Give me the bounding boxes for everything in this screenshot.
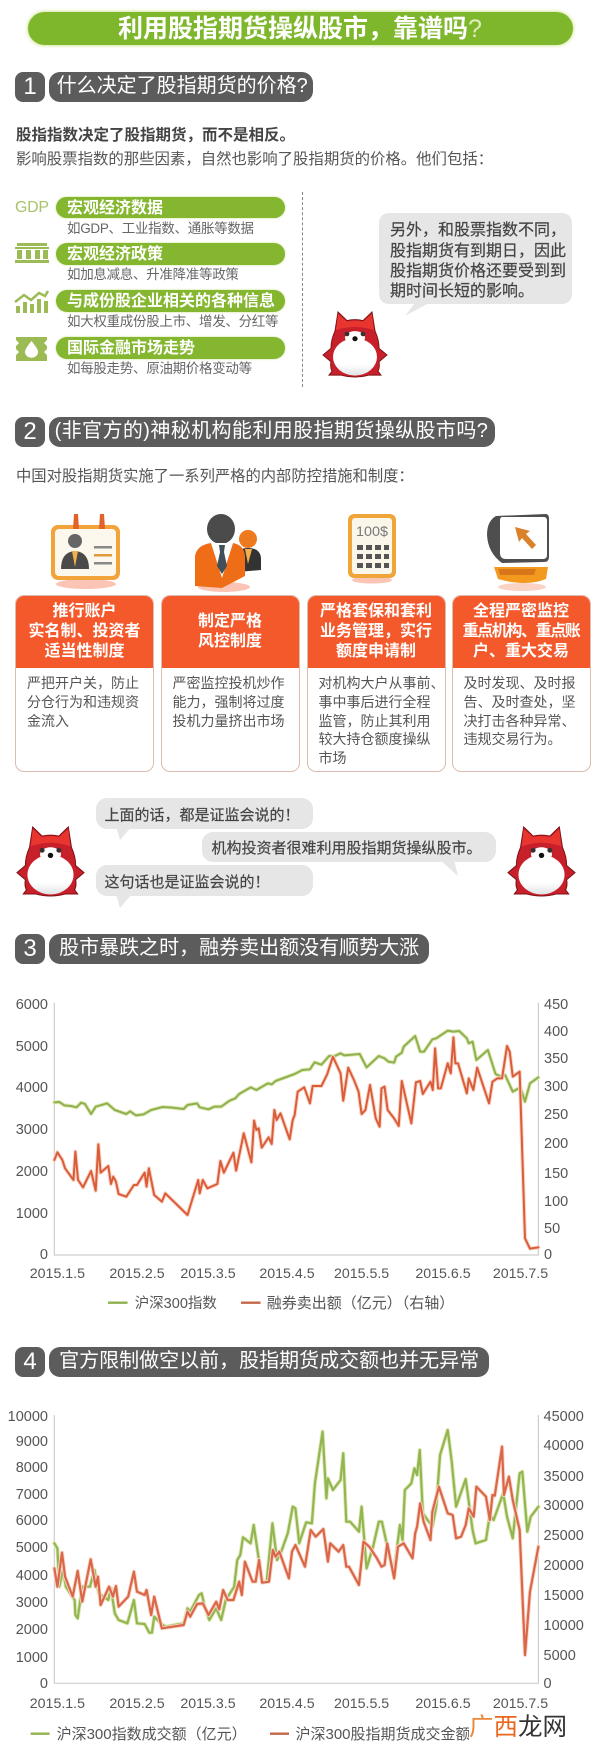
card 3 header xyxy=(308,596,444,668)
line chart: CSI 300 turnover vs futures turnover xyxy=(8,1409,584,1743)
speech bubble: top tail xyxy=(117,829,130,840)
card 1 body: 金流入 xyxy=(27,713,69,729)
icon: calculator: 100$ xyxy=(356,523,388,539)
card 1 body: 严把开户关，防止 xyxy=(27,675,139,691)
callout: expiry date speech bubble: 股指期货价格还要受到到 xyxy=(390,262,566,280)
section 1 number: 1 xyxy=(23,73,37,100)
line chart: CSI 300 index vs short-selling amount: 200 xyxy=(544,1136,568,1152)
card 4 header xyxy=(452,596,590,668)
card 3 body: 监管，防止其利用 xyxy=(318,713,430,729)
line chart: CSI 300 turnover vs futures turnover: 1000 xyxy=(16,1650,48,1666)
line chart: CSI 300 turnover vs futures turnover: 9000 xyxy=(16,1434,48,1450)
line chart: CSI 300 turnover vs futures turnover: 40000 xyxy=(544,1438,584,1454)
line chart: CSI 300 turnover vs futures turnover: 沪深300指数成交额（亿元） xyxy=(57,1725,247,1743)
section 4 number: 4 xyxy=(23,1348,37,1375)
icon: bank xyxy=(15,243,49,263)
card 4 body: 及时发现、及时报 xyxy=(464,675,576,691)
line chart: CSI 300 turnover vs futures turnover: 5000 xyxy=(16,1540,48,1556)
line chart: CSI 300 turnover vs futures turnover: 0 xyxy=(544,1676,552,1692)
card 1 body: 分仓行为和违规资 xyxy=(27,694,139,710)
line chart: CSI 300 turnover vs futures turnover: 20000 xyxy=(544,1558,584,1574)
section 3 heading: 股市暴跌之时，融券卖出额没有顺势大涨 xyxy=(59,937,419,959)
card 3 body: 市场 xyxy=(318,750,346,766)
card 2 body: 投机力量挤出市场 xyxy=(172,713,284,729)
line chart: CSI 300 turnover vs futures turnover: 2015.3.5 xyxy=(180,1696,236,1712)
line chart: CSI 300 turnover vs futures turnover: 10000 xyxy=(544,1618,584,1634)
icon: GDP: GDP xyxy=(15,199,49,216)
speech bubble: middle tail xyxy=(442,862,458,876)
line chart: CSI 300 index vs short-selling amount: 0 xyxy=(40,1247,48,1263)
section 4 heading: 官方限制做空以前，股指期货成交额也并无异常 xyxy=(59,1350,479,1372)
section 3 heading xyxy=(49,934,429,964)
line chart: CSI 300 index vs short-selling amount: 350 xyxy=(544,1051,568,1067)
card 1 header: 推行账户 xyxy=(52,603,116,620)
line chart: CSI 300 turnover vs futures turnover: 30000 xyxy=(544,1498,584,1514)
section 3 number: 3 xyxy=(23,935,37,962)
section 4 number xyxy=(15,1347,45,1377)
line chart: CSI 300 turnover vs futures turnover: 25000 xyxy=(544,1528,584,1544)
line chart: CSI 300 turnover vs futures turnover: 2015.4.5 xyxy=(259,1696,315,1712)
pill: international markets: 国际金融市场走势 xyxy=(67,340,195,357)
speech bubble 3: 这句话也是证监会说的！ xyxy=(104,874,270,891)
line chart: CSI 300 index vs short-selling amount: 融券卖出额（亿元）（右轴） xyxy=(267,1295,454,1312)
line chart: CSI 300 index vs short-selling amount: 150 xyxy=(544,1166,568,1182)
line chart: CSI 300 turnover vs futures turnover: 15000 xyxy=(544,1588,584,1604)
line chart: CSI 300 index vs short-selling amount: 450 xyxy=(544,997,568,1013)
line chart: CSI 300 index vs short-selling amount: 0 xyxy=(544,1247,552,1263)
line chart: CSI 300 index vs short-selling amount: 2015.2.5 xyxy=(109,1266,165,1282)
card 2 body xyxy=(172,675,284,729)
line chart: CSI 300 index vs short-selling amount: 6000 xyxy=(16,997,48,1013)
card 1 header xyxy=(16,596,153,668)
card 4 body: 违规交易行为。 xyxy=(464,731,562,747)
card 3 body xyxy=(318,675,444,766)
section 2 heading: (非官方的)神秘机构能利用股指期货操纵股市吗? xyxy=(55,420,488,442)
line chart: CSI 300 turnover vs futures turnover: 10000 xyxy=(8,1409,48,1425)
speech bubble 2 xyxy=(202,832,496,862)
line chart: CSI 300 turnover vs futures turnover: 4000 xyxy=(16,1568,48,1584)
card 4 header: 重点机构、重点账 xyxy=(463,623,579,640)
pill: constituent company info: 与成份股企业相关的各种信息 xyxy=(67,293,275,310)
line chart: CSI 300 index vs short-selling amount: 2015.3.5 xyxy=(180,1266,236,1282)
line chart: CSI 300 index vs short-selling amount: 2015.1.5 xyxy=(30,1266,85,1282)
text: macro policy detail: 如加息减息、升准降准等政策 xyxy=(67,267,239,282)
icon: monitor with cursor xyxy=(487,514,549,591)
callout: expiry date speech bubble xyxy=(379,213,572,316)
line chart: CSI 300 turnover vs futures turnover: 2015.1.5 xyxy=(30,1696,85,1712)
line chart: CSI 300 index vs short-selling amount: 3000 xyxy=(16,1122,48,1138)
card 4 body: 决打击各种异常、 xyxy=(464,713,576,729)
section 1 number xyxy=(15,72,45,102)
line chart: CSI 300 turnover vs futures turnover: 2000 xyxy=(16,1622,48,1638)
card 3 header: 额度申请制 xyxy=(336,643,416,660)
line chart: CSI 300 turnover vs futures turnover: 2015.6.5 xyxy=(415,1696,471,1712)
callout: expiry date speech bubble: 股指期货有到期日，因此 xyxy=(390,242,566,260)
line chart: CSI 300 index vs short-selling amount: 2015.6.5 xyxy=(415,1266,471,1282)
line chart: CSI 300 turnover vs futures turnover: 6000 xyxy=(16,1513,48,1529)
pill: macro data: 宏观经济数据 xyxy=(67,200,163,217)
line chart: CSI 300 index vs short-selling amount: 2015.5.5 xyxy=(334,1266,389,1282)
line chart: CSI 300 index vs short-selling amount: 2000 xyxy=(16,1164,48,1180)
text: macro data detail: 如GDP、工业指数、通胀等数据 xyxy=(67,221,254,236)
card 2 body: 严密监控投机炒作 xyxy=(172,675,284,691)
icon: ID card xyxy=(51,514,120,589)
line chart: CSI 300 turnover vs futures turnover: 7000 xyxy=(16,1487,48,1503)
callout: expiry date speech bubble: 另外，和股票指数不同， xyxy=(390,221,566,239)
card 4 body xyxy=(464,675,576,747)
line chart: CSI 300 turnover vs futures turnover: 2015.5.5 xyxy=(334,1696,389,1712)
speech bubble 2: 机构投资者很难利用股指期货操纵股市。 xyxy=(212,840,482,857)
card 2 header: 制定严格 xyxy=(198,613,262,630)
line chart: CSI 300 turnover vs futures turnover: 2015.2.5 xyxy=(109,1696,165,1712)
title: 利用股指期货操纵股市，靠谱吗? xyxy=(118,15,482,43)
speech bubble 3 xyxy=(96,865,313,896)
panel: card 1 xyxy=(15,595,154,772)
line chart: CSI 300 turnover vs futures turnover: 45000 xyxy=(544,1409,584,1425)
icon: calculator xyxy=(348,514,396,584)
pill: macro policy: 宏观经济政策 xyxy=(67,246,163,263)
line chart: CSI 300 index vs short-selling amount xyxy=(16,997,568,1312)
icon: businessmen xyxy=(195,514,261,592)
line chart: CSI 300 turnover vs futures turnover: 5000 xyxy=(544,1648,576,1664)
section 4 heading xyxy=(49,1347,489,1377)
card 2 header xyxy=(162,596,298,668)
line chart: CSI 300 index vs short-selling amount: 4000 xyxy=(16,1080,48,1096)
line chart: CSI 300 turnover vs futures turnover: 2015.7.5 xyxy=(493,1696,548,1712)
card 4 body: 告、及时查处，坚 xyxy=(464,694,576,710)
card 3 body: 事中事后进行全程 xyxy=(318,694,430,710)
section 2 number xyxy=(15,417,45,447)
panel: card 2 xyxy=(160,595,300,772)
line chart: CSI 300 index vs short-selling amount: 250 xyxy=(544,1107,568,1123)
card 4 header: 户、重大交易 xyxy=(473,643,569,660)
section 1 heading: 什么决定了股指期货的价格? xyxy=(57,75,308,97)
pill: international markets xyxy=(56,337,285,359)
line chart: CSI 300 turnover vs futures turnover: 8000 xyxy=(16,1460,48,1476)
title xyxy=(28,12,572,45)
card 3 header: 严格套保和套利 xyxy=(320,603,432,620)
icon: left fox mascot xyxy=(16,826,85,896)
pill: macro data xyxy=(56,197,285,218)
card 1 body xyxy=(27,675,139,729)
card 1 header: 实名制、投资者 xyxy=(28,623,140,640)
card 3 body: 对机构大户从事前、 xyxy=(318,675,444,691)
pill: macro policy xyxy=(56,243,285,265)
card 3 header: 业务管理，实行 xyxy=(320,623,432,640)
section 1 heading xyxy=(49,72,313,102)
line chart: CSI 300 turnover vs futures turnover: 35000 xyxy=(544,1469,584,1485)
panel: card 4 xyxy=(452,595,590,772)
line chart: CSI 300 index vs short-selling amount: 1000 xyxy=(16,1206,48,1222)
line chart: CSI 300 index vs short-selling amount: 400 xyxy=(544,1024,568,1040)
line chart: CSI 300 index vs short-selling amount: 2015.4.5 xyxy=(259,1266,315,1282)
line chart: CSI 300 index vs short-selling amount: 沪深300指数 xyxy=(135,1295,217,1312)
card 4 header: 全程严密监控 xyxy=(473,603,569,620)
line chart: CSI 300 index vs short-selling amount: 100 xyxy=(544,1194,568,1210)
intro sentence: 影响股票指数的那些因素，自然也影响了股指期货的价格。他们包括： xyxy=(16,151,493,168)
section 2 intro: 中国对股指期货实施了一系列严格的内部防控措施和制度： xyxy=(16,468,414,485)
card 1 header: 适当性制度 xyxy=(44,643,124,660)
line chart: CSI 300 index vs short-selling amount: 2015.7.5 xyxy=(493,1266,548,1282)
text: international markets detail: 如每股走势、原油期价格变动等 xyxy=(67,361,252,376)
icon: oil drop xyxy=(16,337,47,361)
callout: expiry date speech bubble: 期时间长短的影响。 xyxy=(390,282,534,300)
icon: right fox mascot xyxy=(507,826,576,896)
line chart: CSI 300 turnover vs futures turnover: 沪深300股指期货成交金额（亿元） xyxy=(296,1725,531,1743)
section 3 number xyxy=(15,934,45,964)
text: company info detail: 如大权重成份股上市、增发、分红等 xyxy=(67,314,278,329)
line chart: CSI 300 index vs short-selling amount: 50 xyxy=(544,1221,560,1237)
line chart: CSI 300 turnover vs futures turnover: 0 xyxy=(40,1676,48,1692)
speech bubble 1: 上面的话，都是证监会说的！ xyxy=(104,807,300,824)
lead sentence: 股指指数决定了股指期货，而不是相反。 xyxy=(16,127,295,144)
card 2 header: 风控制度 xyxy=(198,633,262,650)
panel: card 3 xyxy=(306,595,446,772)
line chart: CSI 300 turnover vs futures turnover: 3000 xyxy=(16,1595,48,1611)
line chart: CSI 300 index vs short-selling amount: 5000 xyxy=(16,1039,48,1055)
icon: rising chart xyxy=(14,290,49,313)
icon: fox mascot xyxy=(322,311,388,378)
speech bubble: bottom tail xyxy=(116,896,130,908)
speech bubble 1 xyxy=(96,798,313,829)
line chart: CSI 300 index vs short-selling amount: 300 xyxy=(544,1079,568,1095)
section 2 number: 2 xyxy=(23,418,37,445)
card 3 body: 较大持仓额度操纵 xyxy=(318,731,430,747)
card 2 body: 能力，强制将过度 xyxy=(172,694,284,710)
watermark: 广西龙网 xyxy=(469,1714,567,1741)
